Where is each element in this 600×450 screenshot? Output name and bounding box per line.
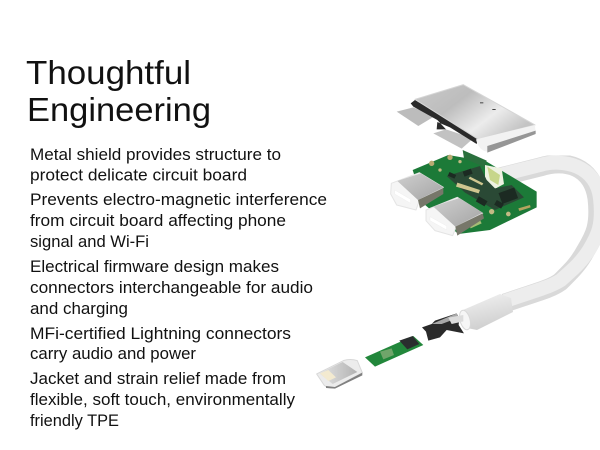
illustration: small green board: [365, 336, 423, 367]
title: Thoughtful: [26, 54, 191, 91]
illustration: USB-C ports: [391, 173, 484, 236]
illustration: strain relief: [458, 294, 513, 331]
text block: interference: [30, 191, 327, 251]
text block: jacket: friendly TPE: [30, 412, 119, 430]
text block: metal shield: protect delicate circuit board: [30, 166, 247, 184]
text block: interference: Prevents electro-magnetic interference: [30, 191, 327, 209]
text block: jacket: Jacket and strain relief made from: [30, 370, 286, 388]
illustration: cable crimp: [422, 313, 464, 341]
text block: firmware: Electrical firmware design makes: [30, 258, 279, 276]
text block: interference: signal and Wi-Fi: [30, 233, 149, 251]
title: [26, 54, 211, 128]
illustration: lightning connector: [317, 359, 362, 389]
illustration: white cable: [500, 163, 600, 303]
text block: firmware: and charging: [30, 300, 128, 318]
text block: firmware: connectors interchangeable for audio: [30, 279, 313, 297]
text block: interference: from circuit board affecting phone: [30, 212, 286, 230]
text block: firmware: [30, 258, 313, 318]
text block: lightning connectors: carry audio and power: [30, 345, 197, 363]
illustration: metal shield: [397, 85, 536, 153]
text block: jacket: flexible, soft touch, environmentally: [30, 391, 296, 409]
text block: lightning connectors: [30, 325, 291, 363]
text block: metal shield: Metal shield provides structure to: [30, 146, 281, 164]
text block: lightning connectors: MFi-certified Lightning connectors: [30, 325, 291, 343]
illustration: circuit board: [413, 150, 537, 234]
title: Engineering: [27, 91, 211, 128]
text block: metal shield: [30, 146, 281, 184]
text block: jacket: [30, 370, 296, 430]
